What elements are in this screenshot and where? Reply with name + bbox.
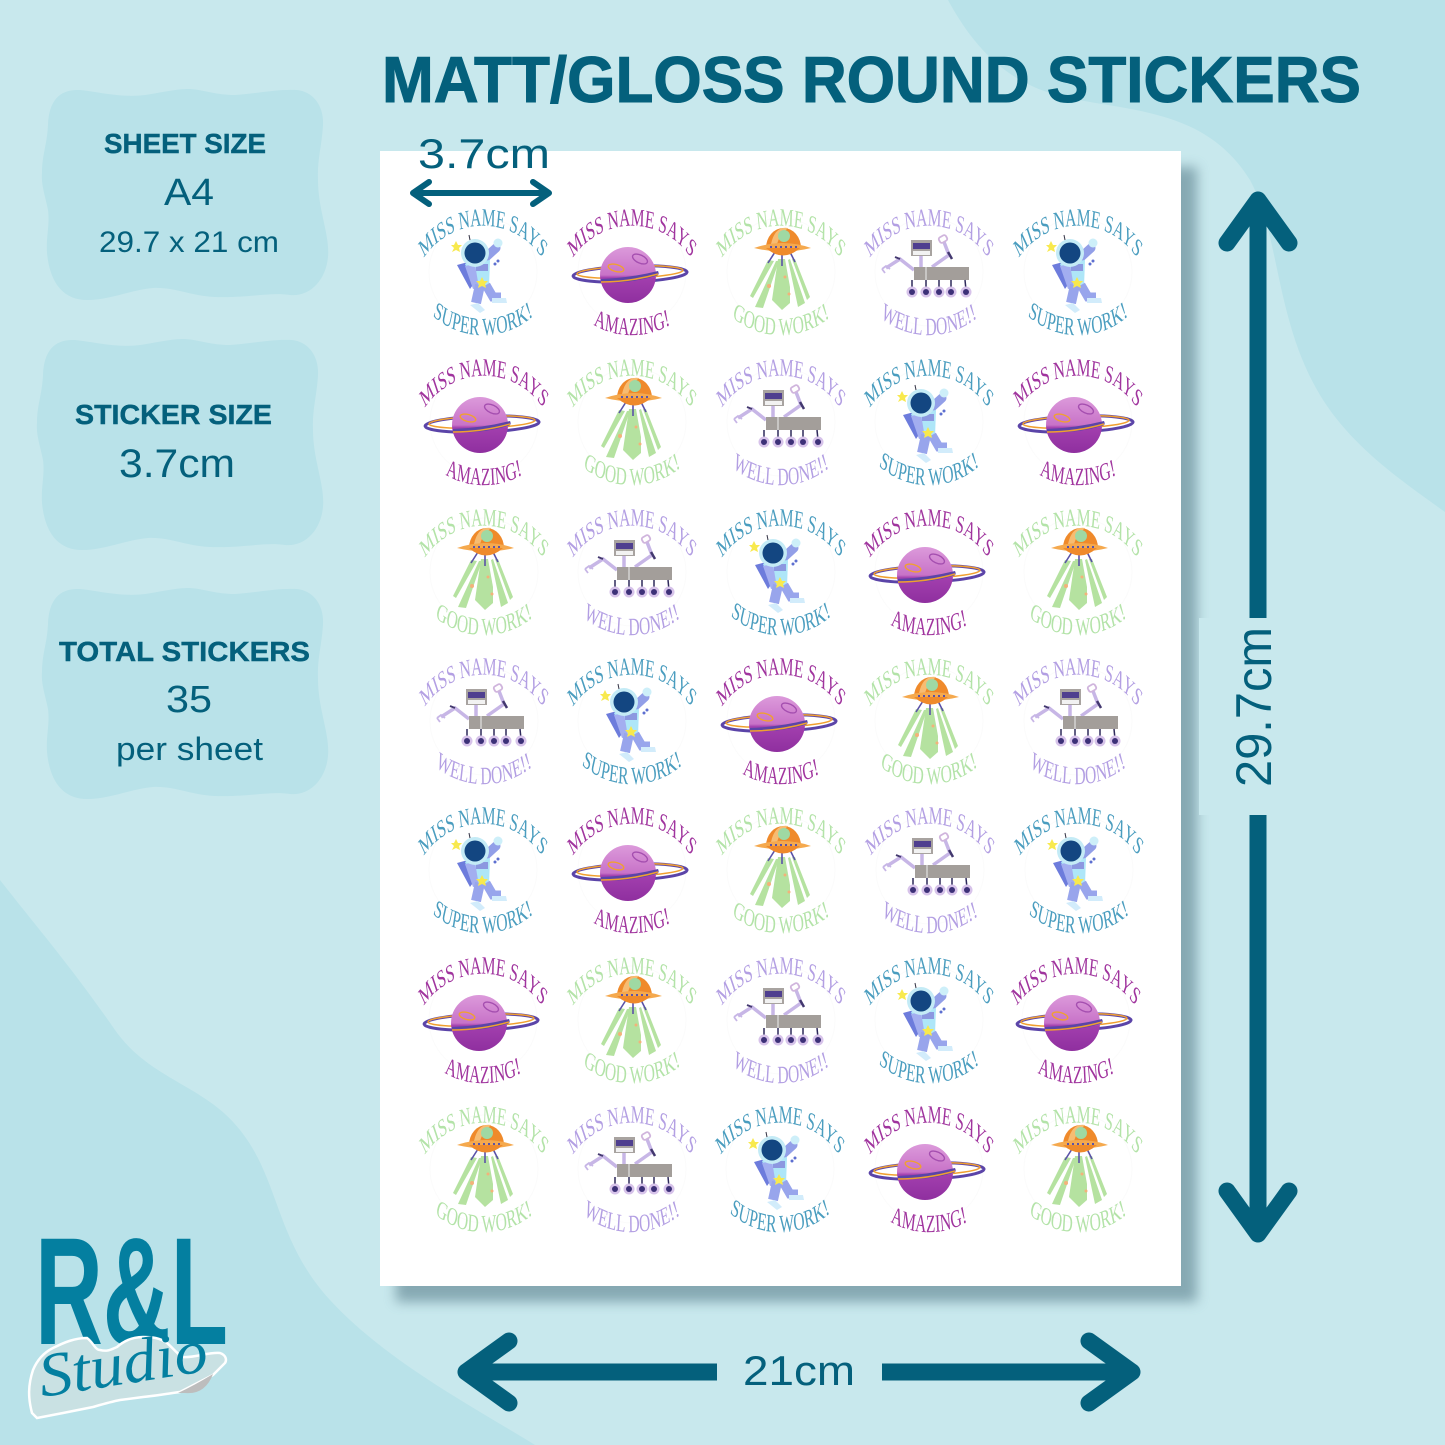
sticker r7c1 ufo: MISS NAME SAYS [416, 1101, 552, 1160]
sticker r7c5 ufo [1012, 1106, 1142, 1233]
sticker r6c4 astronaut [864, 957, 994, 1084]
sticker r7c2 rover [566, 1106, 696, 1232]
sticker r4c1 rover: MISS NAME SAYS [418, 658, 548, 706]
sticker r5c3 ufo: GOOD WORK! [731, 896, 831, 940]
sticker r5c1 astronaut [418, 807, 548, 934]
panel: sticker size [37, 339, 323, 550]
sticker r6c3 rover [716, 957, 846, 1084]
sticker r5c2 planet [566, 807, 696, 934]
sticker r7c4 planet: MISS NAME SAYS [861, 1101, 997, 1160]
sticker r6c2 ufo: GOOD WORK! [582, 1046, 682, 1090]
sticker r2c2 ufo: GOOD WORK! [585, 454, 679, 486]
sticker r5c5 astronaut: MISS NAME SAYS [1011, 802, 1147, 861]
sticker r2c5 planet: MISS NAME SAYS [1012, 359, 1142, 408]
sticker r5c2 planet: MISS NAME SAYS [564, 802, 700, 861]
sticker r4c1 rover [418, 658, 548, 784]
sticker r1c5 astronaut: MISS NAME SAYS [1012, 209, 1142, 258]
sticker r4c5 rover: WELL DONE!! [1033, 752, 1124, 784]
sticker r4c5 rover: MISS NAME SAYS [1012, 658, 1142, 706]
sticker r5c1 astronaut: SUPER WORK! [431, 895, 535, 940]
sticker r4c1 rover: WELL DONE!! [439, 752, 530, 784]
sticker r5c4 rover: WELL DONE!! [880, 896, 980, 939]
logo: R&L Studio: Studio [34, 1317, 212, 1411]
sticker r6c5 planet: MISS NAME SAYS [1008, 952, 1144, 1011]
sticker r2c4 astronaut [864, 359, 994, 486]
panel: sheet size: 29.7 x 21 cm [99, 226, 279, 259]
sticker r3c3 astronaut: MISS NAME SAYS [716, 509, 846, 558]
panel: sticker size: 3.7cm [119, 442, 235, 486]
sticker r4c4 ufo: MISS NAME SAYS [864, 658, 994, 706]
logo: R&L Studio [29, 1206, 228, 1418]
sticker r7c2 rover: WELL DONE!! [582, 1195, 682, 1238]
sticker r3c1 ufo [418, 509, 548, 636]
sticker r1c2 planet: MISS NAME SAYS [566, 209, 696, 258]
sticker r4c3 planet: AMAZING! [742, 759, 818, 784]
sheet shadow [396, 167, 1197, 1302]
sticker r6c1 planet [418, 957, 548, 1084]
sticker r2c5 planet [1012, 359, 1142, 486]
height label [1199, 618, 1360, 815]
sticker r3c5 ufo [1012, 509, 1142, 636]
panel: total stickers: per sheet [116, 731, 263, 767]
sticker r1c3 ufo: GOOD WORK! [734, 304, 828, 336]
sticker r6c1 planet: AMAZING! [443, 1052, 523, 1089]
sticker r5c5 astronaut: SUPER WORK! [1027, 895, 1131, 940]
sticker r7c3 astronaut: SUPER WORK! [728, 1194, 832, 1239]
sticker r6c5 planet: AMAZING! [1036, 1052, 1116, 1089]
title: MATT/GLOSS ROUND STICKERS [382, 43, 1361, 116]
sticker r1c4 rover: WELL DONE!! [884, 303, 976, 336]
sticker r7c3 astronaut [714, 1106, 844, 1232]
sticker r7c1 ufo: GOOD WORK! [434, 1195, 534, 1239]
panel: total stickers: 35 [166, 679, 212, 721]
sticker r3c3 astronaut [716, 509, 846, 636]
sticker r5c3 ufo: MISS NAME SAYS [713, 802, 849, 861]
sticker r6c4 astronaut: MISS NAME SAYS [861, 952, 997, 1011]
sticker r2c4 astronaut: MISS NAME SAYS [864, 359, 994, 408]
panel: total stickers [42, 588, 328, 799]
panel: sheet size: SHEET SIZE [104, 128, 266, 159]
sticker r5c2 planet: AMAZING! [592, 902, 672, 939]
sticker r1c1 astronaut [418, 209, 548, 336]
sticker r3c5 ufo: GOOD WORK! [1031, 604, 1125, 636]
width label [717, 1330, 882, 1410]
sticker r2c1 planet [418, 359, 548, 486]
logo: R&L Studio: R&L [35, 1206, 228, 1377]
background wave: bottom left [0, 880, 535, 1445]
sticker r2c2 ufo: MISS NAME SAYS [566, 359, 696, 408]
sticker r1c3 ufo: MISS NAME SAYS [716, 209, 846, 258]
sticker r7c2 rover: MISS NAME SAYS [564, 1101, 700, 1160]
arrow: sheet height [1227, 200, 1289, 1234]
sticker r6c3 rover: MISS NAME SAYS [713, 952, 849, 1011]
sticker r6c2 ufo [566, 957, 696, 1084]
sticker r2c4 astronaut: SUPER WORK! [880, 452, 978, 486]
sticker r7c3 astronaut: MISS NAME SAYS [712, 1101, 848, 1160]
sticker r3c1 ufo: GOOD WORK! [437, 604, 531, 636]
sticker r7c5 ufo: GOOD WORK! [1028, 1195, 1128, 1239]
sticker r3c2 rover: MISS NAME SAYS [566, 509, 696, 558]
sticker r4c2 astronaut [566, 658, 696, 784]
sticker r5c4 rover: MISS NAME SAYS [862, 802, 998, 861]
sticker r5c4 rover [864, 807, 994, 934]
sticker r3c5 ufo: MISS NAME SAYS [1012, 509, 1142, 558]
sticker r1c5 astronaut: SUPER WORK! [1028, 302, 1127, 336]
sticker r7c1 ufo [418, 1106, 548, 1233]
arrow: sheet width [466, 1341, 1132, 1403]
sticker r5c1 astronaut: MISS NAME SAYS [415, 802, 551, 861]
sticker r4c2 astronaut: SUPER WORK! [582, 752, 681, 784]
sticker r4c3 planet [716, 658, 846, 784]
A4 sheet [380, 151, 1181, 1286]
sticker r2c3 rover: MISS NAME SAYS [716, 359, 846, 408]
sticker r4c5 rover [1012, 658, 1142, 784]
sticker r6c2 ufo: MISS NAME SAYS [564, 952, 700, 1011]
sticker r5c5 astronaut [1014, 807, 1144, 934]
sticker r1c3 ufo [716, 209, 846, 336]
sticker r7c4 planet [864, 1106, 994, 1232]
sticker r4c4 ufo: GOOD WORK! [882, 752, 976, 785]
background wave: top right [948, 0, 1445, 512]
panel: sheet size: A4 [164, 172, 214, 214]
sticker r6c1 planet: MISS NAME SAYS [415, 952, 551, 1011]
sticker width label: 3.7cm [418, 130, 550, 177]
sticker r2c1 planet: MISS NAME SAYS [418, 359, 548, 408]
sticker r3c3 astronaut: SUPER WORK! [732, 602, 830, 636]
sticker r1c5 astronaut [1012, 209, 1142, 336]
sticker r3c4 planet: MISS NAME SAYS [864, 509, 994, 558]
sticker r1c4 rover: MISS NAME SAYS [864, 209, 994, 258]
sticker r1c2 planet: AMAZING! [594, 310, 669, 336]
sticker r4c3 planet: MISS NAME SAYS [716, 658, 846, 706]
sticker r2c1 planet: AMAZING! [446, 460, 521, 486]
sticker r6c4 astronaut: SUPER WORK! [877, 1045, 981, 1090]
panel: sheet size [42, 89, 328, 300]
sticker r4c2 astronaut: MISS NAME SAYS [566, 658, 696, 706]
sticker r5c3 ufo [716, 807, 846, 934]
sticker r2c2 ufo [566, 359, 696, 486]
sticker r7c5 ufo: MISS NAME SAYS [1010, 1101, 1146, 1160]
sticker r3c1 ufo: MISS NAME SAYS [418, 509, 548, 558]
panel: total stickers: TOTAL STICKERS [59, 636, 310, 667]
arrow: sticker width [413, 182, 549, 204]
sticker r7c4 planet: AMAZING! [889, 1201, 969, 1238]
sticker r3c2 rover [566, 509, 696, 636]
sticker r6c5 planet [1010, 957, 1140, 1084]
height label: 29.7cm [1226, 627, 1282, 787]
sticker r1c1 astronaut: MISS NAME SAYS [418, 209, 548, 258]
sticker r3c2 rover: WELL DONE!! [587, 603, 678, 636]
sticker r1c1 astronaut: SUPER WORK! [434, 302, 532, 336]
sticker r2c3 rover: WELL DONE!! [736, 453, 828, 486]
sticker r1c4 rover [864, 209, 994, 336]
sticker r1c2 planet [566, 209, 696, 336]
sticker r3c4 planet [864, 509, 994, 636]
sticker r4c4 ufo [864, 658, 994, 785]
width label: 21cm [743, 1347, 855, 1394]
sticker r3c4 planet: AMAZING! [890, 610, 966, 636]
sticker r2c5 planet: AMAZING! [1040, 460, 1115, 486]
sticker r6c3 rover: WELL DONE!! [731, 1046, 831, 1089]
panel: sticker size: STICKER SIZE [75, 399, 272, 430]
sticker r2c3 rover [716, 359, 846, 486]
